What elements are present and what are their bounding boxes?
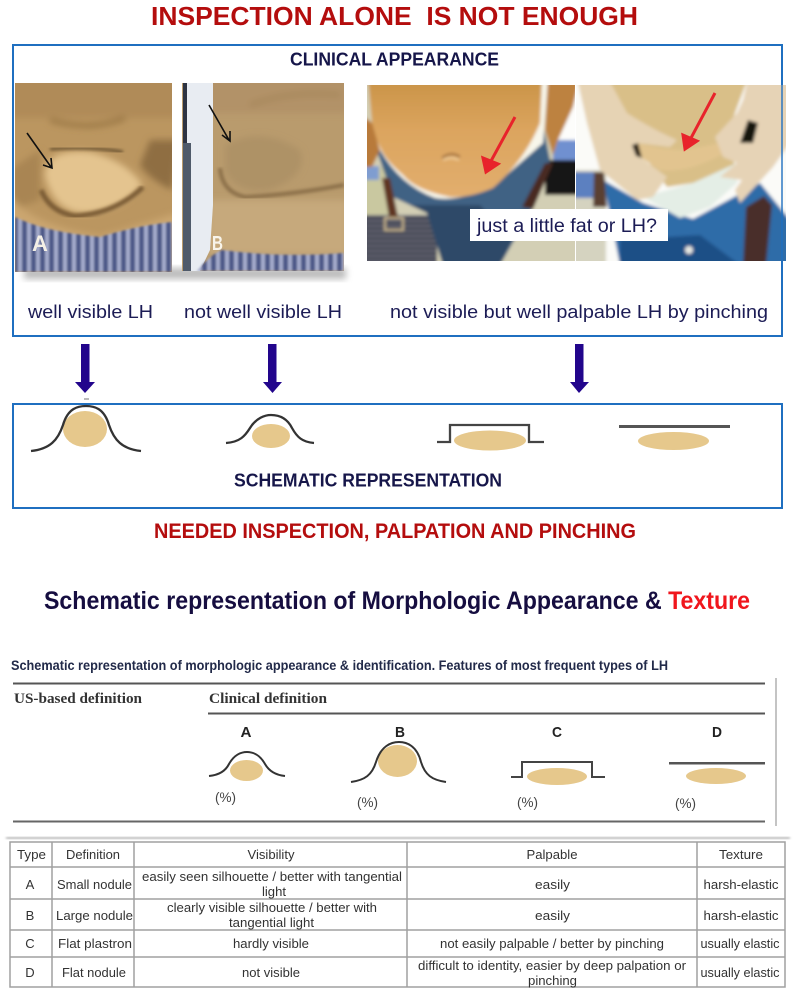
row D: not visible — [242, 965, 300, 980]
photo A: well visible LH — [15, 83, 172, 272]
type C: (%) — [517, 794, 538, 810]
table: features of LH types — [6, 837, 790, 988]
type D: (%) — [675, 795, 696, 811]
type D: D — [712, 724, 722, 741]
row D: pinching — [528, 973, 577, 988]
callout: just a little fat or LH: just a little fat or LH? — [476, 216, 657, 237]
type D — [669, 724, 765, 811]
row D: Flat nodule — [62, 965, 126, 980]
row A: easily seen silhouette / better with tangential — [142, 869, 402, 884]
arrow: down to shape 1 — [75, 344, 95, 393]
type B: (%) — [357, 794, 378, 810]
right border over photo — [781, 85, 783, 261]
heading: morphologic appearance and texture: Schematic representation of Morphologic Appearance & Texture — [44, 587, 750, 615]
row B: Large nodule — [56, 908, 133, 923]
row C: hardly visible — [233, 936, 309, 951]
schematic: flat nodule — [619, 425, 730, 450]
table header: Type — [17, 847, 46, 862]
row A — [26, 869, 779, 899]
table header: Definition — [66, 847, 120, 862]
arrow: photo B — [209, 105, 230, 141]
heading: schematic representation: SCHEMATIC REPRESENTATION — [234, 470, 502, 490]
row D — [25, 958, 780, 988]
row D: usually elastic — [700, 965, 780, 980]
photo B: not well visible LH — [182, 78, 348, 271]
label: clinical definition: Clinical definition — [209, 691, 328, 707]
table header: Visibility — [248, 847, 295, 862]
type C: C — [552, 724, 562, 741]
arrow: down to shapes 3 and 4 — [570, 344, 589, 393]
arrow: photo A — [27, 133, 52, 168]
label: US-based definition: US-based definition — [14, 691, 143, 707]
row C — [25, 936, 780, 951]
type C — [511, 724, 605, 810]
photo D: pinching — [576, 85, 786, 261]
row A: light — [262, 884, 286, 899]
photo C: not visible — [367, 85, 575, 261]
title: INSPECTION ALONE IS NOT ENOUGH — [151, 1, 638, 31]
table header: Texture — [719, 847, 763, 862]
subheading: needed inspection: NEEDED INSPECTION, PALPATION AND PINCHING — [154, 520, 636, 543]
type A: A — [240, 724, 252, 741]
row B: harsh-elastic — [704, 908, 779, 923]
caption: not well visible LH: not well visible LH — [184, 301, 342, 322]
photo shadow — [24, 268, 346, 279]
arrow: red, photo D — [683, 93, 715, 149]
row D: D — [25, 965, 35, 980]
row B: tangential light — [229, 915, 314, 930]
table header: Palpable — [526, 847, 578, 862]
row C: usually elastic — [700, 936, 780, 951]
type A: (%) — [215, 789, 236, 805]
table header — [17, 847, 763, 862]
caption: not visible but palpable: not visible but well palpable LH by pinching — [390, 301, 768, 322]
row C: not easily palpable / better by pinching — [440, 936, 664, 951]
panel: clinical appearance — [10, 45, 792, 336]
panel: schematic representation — [13, 398, 782, 508]
schematic: large nodule — [31, 406, 141, 451]
type B — [351, 724, 446, 810]
row C: C — [25, 936, 35, 951]
row A: A — [26, 877, 35, 892]
label A: A — [32, 231, 48, 256]
caption: well visible LH: well visible LH — [27, 301, 153, 322]
callout: just a little fat or LH — [470, 209, 668, 241]
row B: clearly visible silhouette / better with — [167, 900, 377, 915]
schematic: flat plastron — [437, 425, 544, 450]
type A — [209, 724, 285, 805]
row D: difficult to identity, easier by deep palpation or — [418, 958, 687, 973]
arrow: red, photo C — [483, 117, 515, 172]
schematic: small nodule — [226, 415, 314, 448]
row A: easily — [535, 877, 571, 892]
panel: clinical definition figure — [13, 678, 777, 826]
row B: easily — [535, 908, 571, 923]
table caption: Schematic representation of morphologic appearance & identification. Features of most frequent types of LH — [11, 658, 668, 673]
row A: Small nodule — [57, 877, 132, 892]
row B — [26, 900, 779, 930]
row B: B — [26, 908, 34, 923]
row A: harsh-elastic — [704, 877, 779, 892]
type B: B — [395, 724, 405, 741]
arrow: down to shape 2 — [263, 344, 282, 393]
heading: clinical appearance: CLINICAL APPEARANCE — [290, 50, 499, 70]
row C: Flat plastron — [58, 936, 132, 951]
label B: B — [212, 233, 223, 255]
